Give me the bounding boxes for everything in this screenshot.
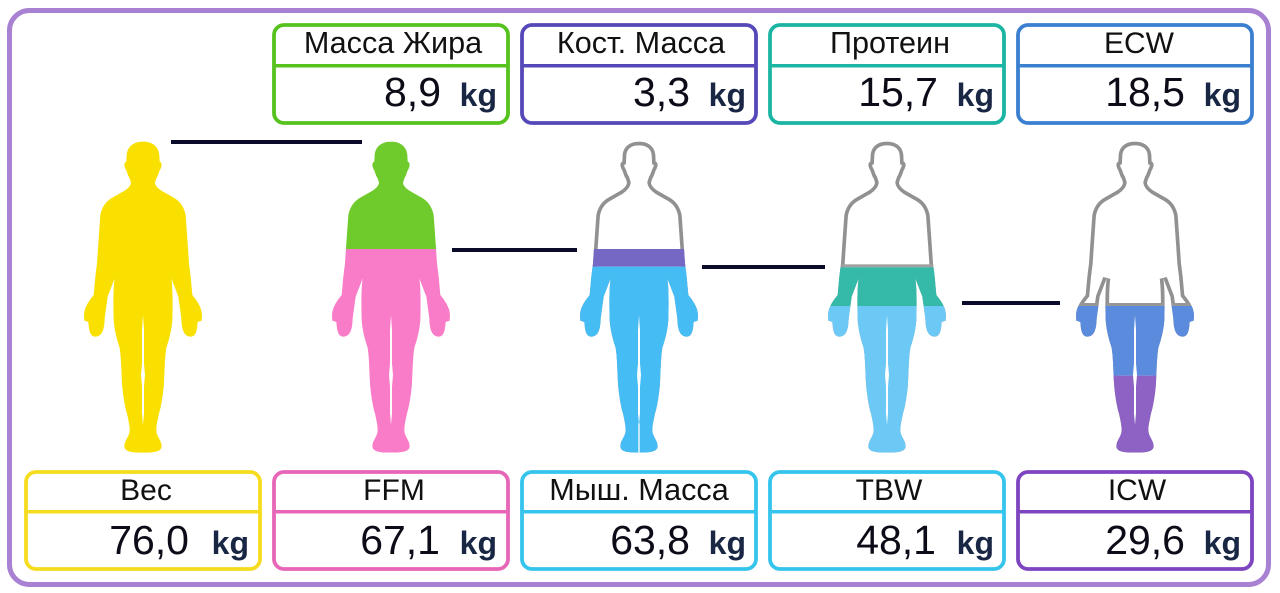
card: Масса Жира: kg [460,77,497,113]
connector line: weight to fat mass [171,140,362,144]
card: ECW [1018,25,1252,123]
card: Масса Жира: Масса Жира [304,26,483,60]
figure: fat mass and FFM [332,142,450,452]
card: TBW: kg [957,525,994,561]
card: Мыш. Масса: 63,8 [610,517,690,563]
card: Протеин: kg [957,77,994,113]
card: ICW [1018,472,1252,569]
figure: bone and muscle mass [580,142,698,453]
card: Протеин [770,25,1004,123]
card: Вес: 76,0 [109,517,189,563]
card: ECW: ECW [1104,27,1175,60]
card: Мыш. Масса: Мыш. Масса [549,473,730,507]
card: FFM: kg [460,525,497,561]
card: Масса Жира: 8,9 [384,69,441,115]
figure: extracellular and intracellular water [1076,142,1194,453]
card: ICW: ICW [1108,474,1167,507]
card: ECW: 18,5 [1105,69,1185,115]
figure: weight, yellow body [84,142,202,453]
card: FFM: FFM [363,474,425,507]
card: Протеин: Протеин [830,26,950,60]
card: Кост. Масса: 3,3 [633,69,690,115]
card: ECW: kg [1204,77,1241,113]
connector line: FFM to bone mass [452,248,577,252]
card: Вес [26,472,260,569]
card: Вес: Вес [120,474,172,507]
card: Кост. Масса [522,25,756,123]
figure: protein and total body water [828,142,946,453]
card: FFM: 67,1 [360,517,440,563]
connector line: muscle mass to protein [702,265,825,269]
card: TBW: 48,1 [856,517,936,563]
card: ICW: kg [1204,525,1241,561]
card: Масса Жира [274,25,508,123]
card: Протеин: 15,7 [858,69,938,115]
card: FFM [274,472,508,569]
card: Вес: kg [212,525,249,561]
card: Мыш. Масса: kg [709,525,746,561]
card: TBW: TBW [856,474,923,507]
connector line: TBW to ECW [962,301,1060,305]
card: Кост. Масса: kg [709,77,746,113]
card: TBW [770,472,1004,569]
card: Мыш. Масса [522,472,756,569]
card: ICW: 29,6 [1105,517,1185,563]
card: Кост. Масса: Кост. Масса [557,26,726,60]
